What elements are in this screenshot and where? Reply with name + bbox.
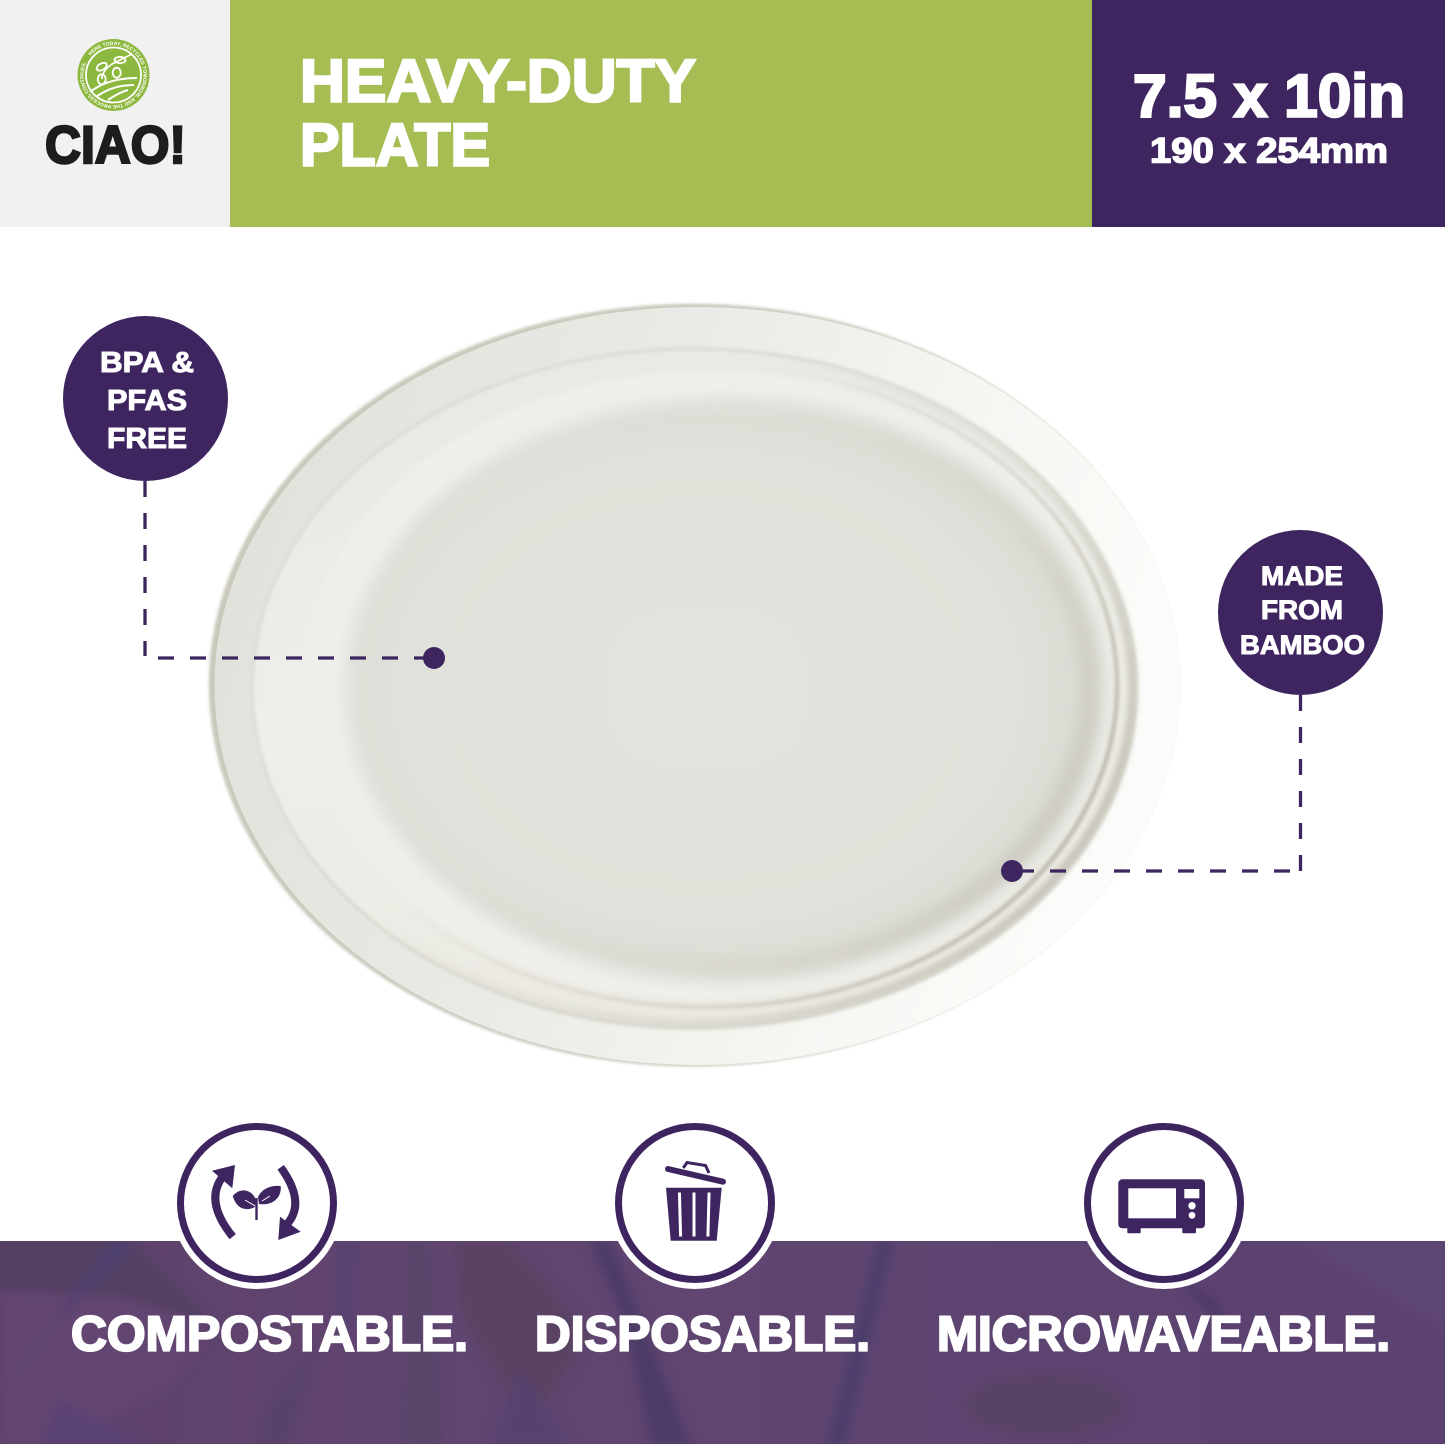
callout line (1018, 695, 1300, 871)
icon: logo badge: HERE TODAY, RECYCLED TOMORROW, AND THE PROCESS CONTINUES. (80, 42, 147, 108)
badge: disposable (609, 1117, 781, 1289)
footer leaf background (0, 1235, 1445, 1445)
callout text: FREE (107, 423, 187, 455)
label: disposable: DISPOSABLE. (535, 1308, 870, 1362)
label: microwaveable: MICROWAVEABLE. (937, 1308, 1390, 1362)
heading line 2: PLATE (300, 112, 490, 178)
label: compostable: COMPOSTABLE. (71, 1308, 468, 1362)
callout dot (423, 647, 445, 669)
header band (0, 0, 1445, 227)
badge: microwaveable (1078, 1117, 1250, 1289)
callout line (145, 481, 434, 658)
icon: trash bin (666, 1162, 723, 1241)
panel: dimensions (1092, 0, 1445, 227)
badge: compostable (171, 1117, 343, 1289)
callout text (100, 347, 194, 455)
heading line 1: HEAVY-DUTY (300, 48, 696, 114)
callout badge (1218, 530, 1383, 695)
icon: compost cycle with sprout (212, 1165, 301, 1240)
plate photo (209, 304, 1181, 1068)
callout text (1240, 561, 1365, 660)
size in inches: 7.5 x 10in (1133, 62, 1405, 130)
callout: BPA and PFAS free (63, 316, 445, 669)
callout dot (1001, 860, 1023, 882)
callout text: BPA & (100, 347, 194, 379)
callout text: FROM (1261, 595, 1343, 625)
callout text: PFAS (107, 385, 187, 417)
panel: logo (0, 0, 230, 227)
icon: microwave (1118, 1179, 1205, 1233)
callout badge (63, 316, 228, 481)
callout text: MADE (1261, 561, 1343, 591)
footer band (0, 1117, 1445, 1445)
panel: title (230, 0, 1092, 227)
logo wordmark: CIAO! (45, 116, 186, 175)
size in millimetres: 190 x 254mm (1150, 132, 1388, 170)
callout text: BAMBOO (1240, 630, 1365, 660)
callout: made from bamboo (1001, 530, 1383, 882)
